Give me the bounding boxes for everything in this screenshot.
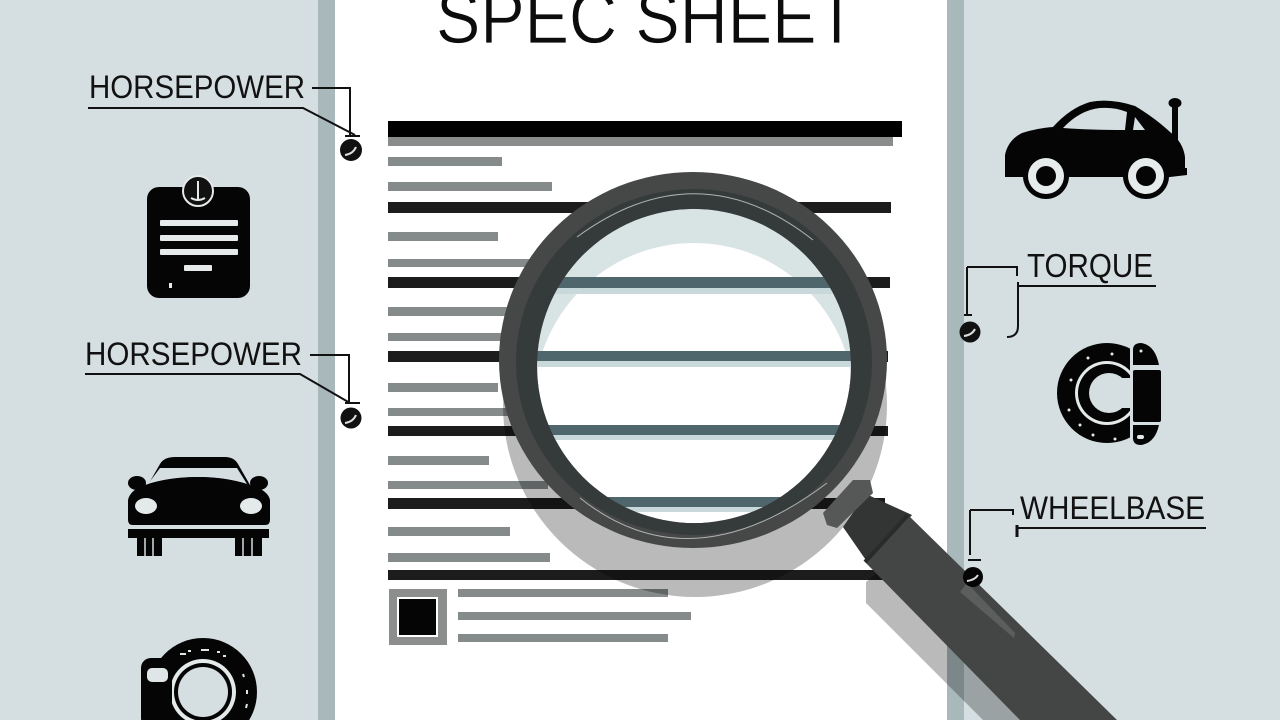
callout: torque (960, 247, 1156, 342)
inner rim (516, 189, 872, 535)
spec thumbnail and caption lines (389, 589, 691, 645)
magnifier shadow (503, 213, 1040, 720)
magnifier handle (823, 480, 1117, 720)
callout: horsepower lower (85, 336, 362, 428)
icon: brake disc and caliper (1057, 343, 1161, 445)
icon: brake disc left (141, 638, 257, 720)
paper sheet with side strips (318, 0, 964, 720)
icon: car side view (1005, 98, 1187, 199)
lens rim (499, 172, 887, 548)
callout: horsepower lower: HORSEPOWER (85, 336, 302, 372)
icon: car front view (128, 457, 270, 556)
callout: wheelbase: WHEELBASE (1020, 490, 1205, 526)
document lines (388, 121, 902, 580)
lens glass (537, 208, 851, 523)
callout: torque: TORQUE (1027, 247, 1153, 284)
callout: horsepower top: HORSEPOWER (89, 69, 305, 105)
icon: clipboard (147, 176, 250, 298)
rim highlights (577, 194, 827, 539)
magnifying glass (499, 172, 887, 563)
callout: wheelbase (963, 490, 1206, 587)
callout: horsepower top (88, 69, 362, 161)
